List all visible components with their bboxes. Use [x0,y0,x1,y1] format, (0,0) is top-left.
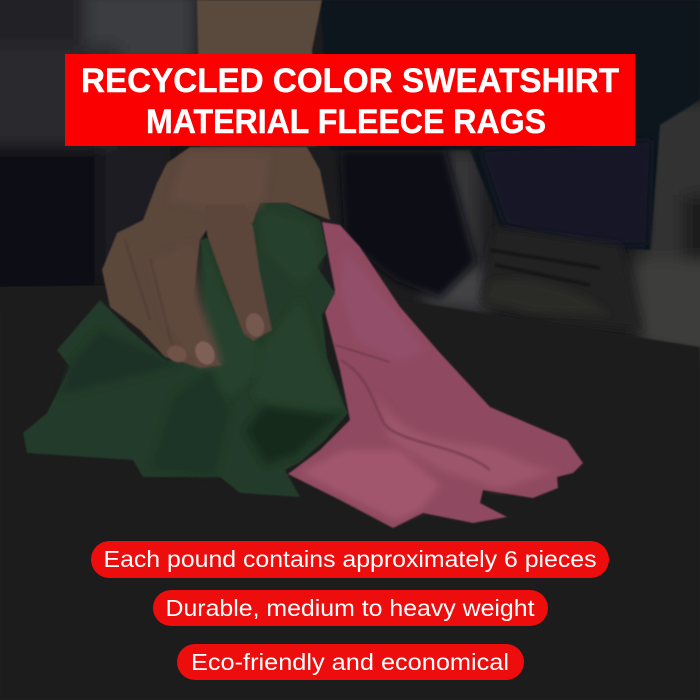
fingernails [192,338,218,368]
jeans [320,0,700,250]
pink rag [288,222,583,528]
feature pill: eco-friendly [177,644,524,680]
title text: RECYCLED COLOR SWEATSHIRT [81,62,619,100]
index finger [205,205,272,341]
hand [102,147,330,368]
feature pill: eco-friendly: Eco-friendly and economical [191,649,509,675]
feature pill: weight [153,590,548,626]
arm [197,0,322,146]
feature pill: pieces per pound: Each pound contains approximately 6 pieces [104,546,596,572]
feature pill: pieces per pound [91,541,609,578]
boot (right) [480,228,642,330]
green rag [23,203,348,497]
feature pill: weight: Durable, medium to heavy weight [166,595,535,621]
title text: MATERIAL FLEECE RAGS [146,103,546,141]
title banner [65,54,635,146]
boot (left, in shadow) [340,150,476,298]
table [0,285,700,700]
title text [81,62,619,141]
